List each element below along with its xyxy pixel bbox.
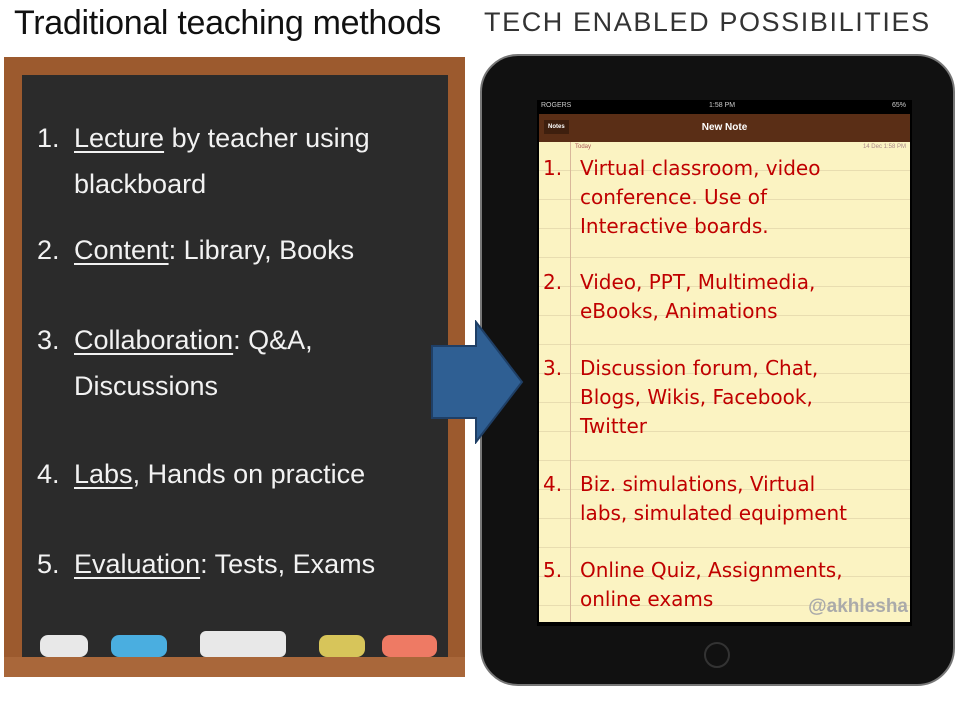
- status bar: [541, 102, 906, 109]
- nav bar: Notes: [548, 124, 565, 130]
- list: traditional methods: [37, 123, 375, 579]
- list: traditional methods: 1.: [37, 123, 60, 153]
- title: tech: TECH ENABLED POSSIBILITIES: [484, 7, 931, 37]
- nav bar: [539, 114, 910, 142]
- list: traditional methods: 4.: [37, 459, 60, 489]
- watermark: @akhlesha: [808, 596, 908, 617]
- list: tech possibilities: Blogs, Wikis, Facebook,: [580, 385, 813, 409]
- list: tech possibilities: labs, simulated equipment: [580, 501, 847, 525]
- status bar: ROGERS: [541, 102, 571, 109]
- list: traditional methods: 2.: [37, 235, 60, 265]
- list: tech possibilities: Online Quiz, Assignments,: [580, 558, 843, 582]
- note paper: Today: [575, 144, 591, 150]
- panel: ipad: [480, 54, 955, 686]
- status bar: 1:58 PM: [709, 102, 735, 109]
- list: traditional methods: 5.: [37, 549, 60, 579]
- list: tech possibilities: 1.: [543, 156, 562, 180]
- icon: chalk pieces: [40, 631, 437, 657]
- list: tech possibilities: Discussion forum, Chat,: [580, 356, 818, 380]
- title: traditional: Traditional teaching methods: [14, 4, 441, 42]
- list: tech possibilities: 3.: [543, 356, 562, 380]
- list: tech possibilities: 4.: [543, 472, 562, 496]
- list: tech possibilities: Video, PPT, Multimedia,: [580, 270, 815, 294]
- list: tech possibilities: [543, 156, 847, 611]
- arrow: [431, 320, 524, 444]
- note paper: 14 Dec 1:58 PM: [863, 144, 906, 150]
- list: tech possibilities: 5.: [543, 558, 562, 582]
- list: tech possibilities: Interactive boards.: [580, 214, 769, 238]
- list: traditional methods: Labs, Hands on practice: [74, 459, 365, 489]
- note paper: [539, 142, 910, 622]
- panel: blackboard: [4, 57, 465, 677]
- list: tech possibilities: conference. Use of: [580, 185, 767, 209]
- list: tech possibilities: eBooks, Animations: [580, 299, 778, 323]
- screen: [537, 100, 912, 626]
- home button: [704, 642, 730, 668]
- list: traditional methods: Lecture by teacher using blackboard: [74, 123, 370, 199]
- list: tech possibilities: Biz. simulations, Virtual: [580, 472, 815, 496]
- list: traditional methods: Content: Library, Books: [74, 235, 354, 265]
- list: traditional methods: 3.: [37, 325, 60, 355]
- status bar: 65%: [892, 102, 906, 109]
- nav bar: New Note: [702, 122, 747, 133]
- list: traditional methods: Collaboration: Q&A, Discussions: [74, 325, 313, 401]
- list: traditional methods: Evaluation: Tests, Exams: [74, 549, 375, 579]
- list: tech possibilities: 2.: [543, 270, 562, 294]
- list: tech possibilities: Virtual classroom, video: [580, 156, 820, 180]
- list: tech possibilities: Twitter: [580, 414, 647, 438]
- list: tech possibilities: online exams: [580, 587, 713, 611]
